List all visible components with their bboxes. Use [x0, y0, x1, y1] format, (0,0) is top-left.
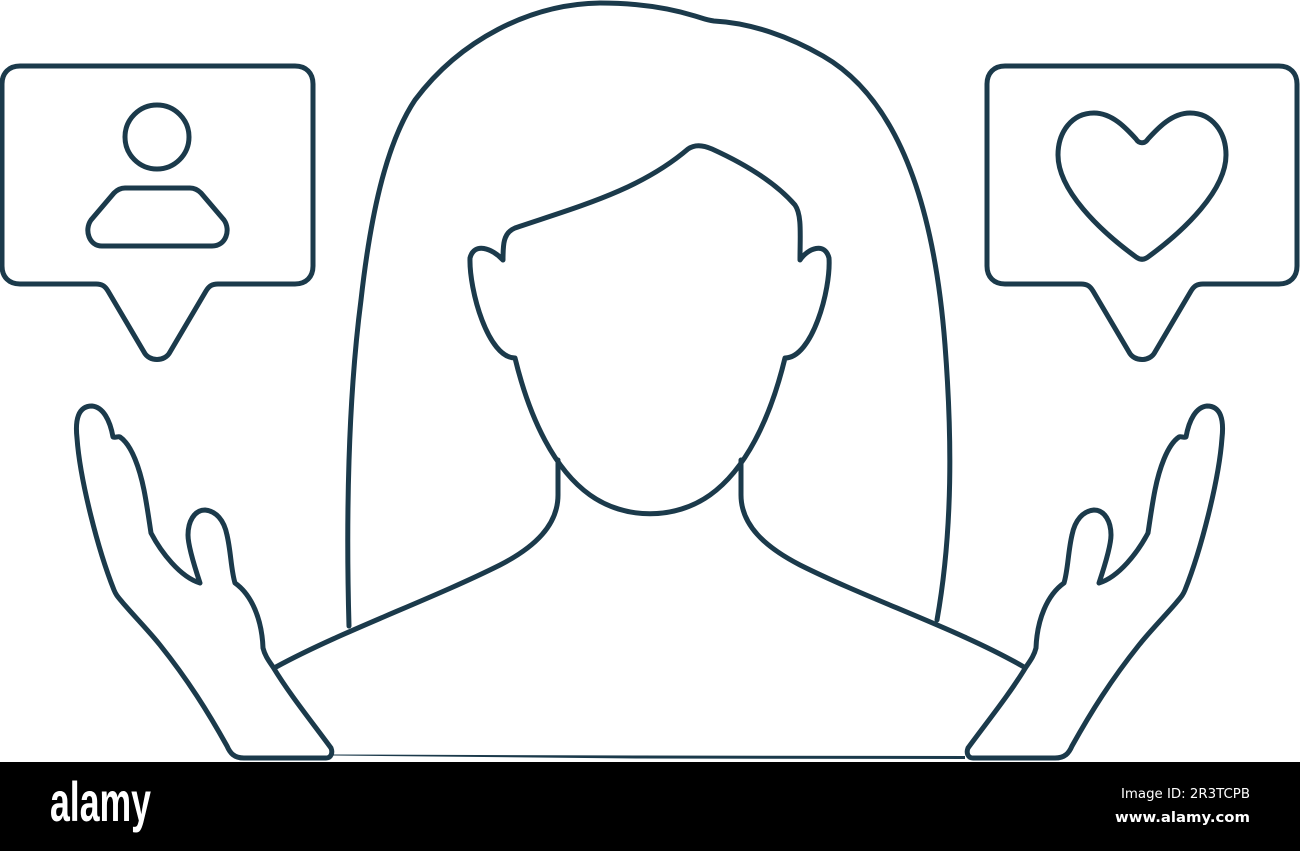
- footer logo: alamy: [50, 770, 151, 833]
- left hand: [76, 406, 332, 758]
- icon: user: [88, 105, 227, 246]
- face and ears: [470, 146, 829, 514]
- icon: heart: [1058, 113, 1226, 259]
- website: www.alamy.com: [1115, 810, 1250, 826]
- image id: Image ID: 2R3TCPB: [1121, 787, 1250, 802]
- neck and shoulders: [276, 460, 1024, 667]
- long hair outline: [348, 3, 950, 626]
- right speech bubble: [987, 66, 1297, 360]
- left speech bubble: [2, 66, 313, 360]
- baseline: [333, 754, 965, 759]
- right hand: [967, 406, 1223, 758]
- footer bar: [0, 762, 1300, 851]
